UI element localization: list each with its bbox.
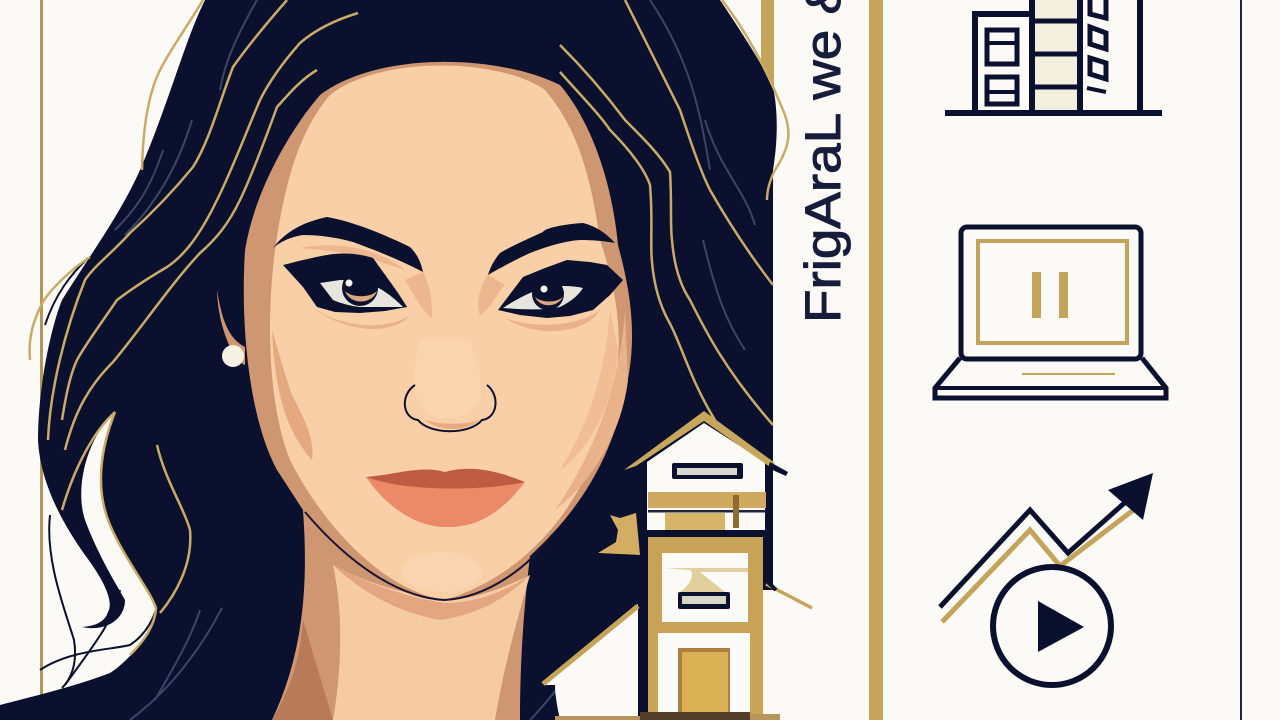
- ear and earring: [217, 290, 245, 365]
- nose: [414, 340, 481, 419]
- right white wing: [765, 590, 785, 720]
- cheek shading: [272, 330, 313, 460]
- base: [640, 712, 750, 720]
- tower band: [640, 530, 768, 536]
- chin highlight: [402, 552, 482, 592]
- tower left edge: [640, 536, 648, 716]
- icon: office building: [945, 0, 1162, 116]
- jaw line: [305, 512, 552, 600]
- neck light area: [333, 565, 530, 720]
- vertical heading: FrigAraL we &: [795, 0, 851, 323]
- under-eye shading: [310, 305, 410, 329]
- stray dark hair wisps: [40, 258, 156, 688]
- eyebrows: [273, 217, 423, 272]
- door: [678, 648, 730, 713]
- left eye: [283, 254, 407, 313]
- right eye: [498, 260, 623, 318]
- gold hair strands: [30, 0, 788, 655]
- chin shadow: [333, 565, 530, 620]
- icon: laptop with pause: [935, 227, 1166, 398]
- grey hair highlights: [115, 0, 755, 720]
- lips: [366, 477, 525, 527]
- upper storey: [647, 423, 765, 530]
- gold flag ornament: [598, 513, 640, 555]
- lower tower frame: [648, 537, 763, 717]
- icon: growth arrow and play button: [940, 473, 1153, 685]
- hair mass: [0, 0, 777, 720]
- icon: house tower: [543, 411, 812, 720]
- face: [270, 65, 619, 600]
- face and neck base: [244, 62, 632, 720]
- portrait: woman with dark hair: [0, 0, 788, 720]
- outfit shadow: [272, 620, 333, 720]
- left white roof wing: [545, 604, 638, 720]
